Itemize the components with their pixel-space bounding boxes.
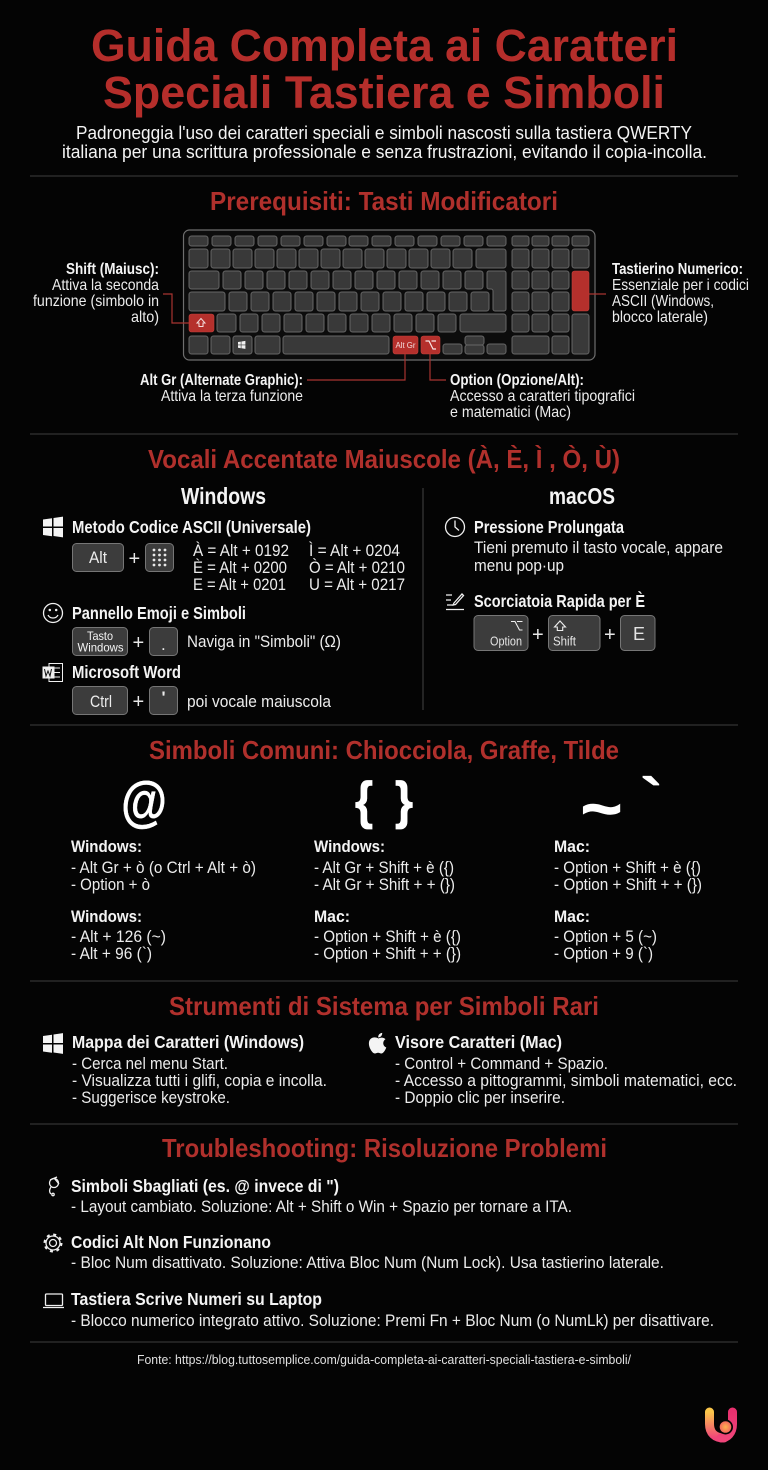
method: scorciatoia rapida: Scorciatoia Rapida per È — [474, 590, 645, 611]
column: chiocciola — [71, 769, 256, 963]
subtitle: Padroneggia l'uso dei caratteri speciali e simboli nascosti sulla tastiera QWERTY — [76, 122, 692, 143]
column: tilde e backtick: - Option + 5 (~) — [554, 927, 657, 946]
method: scorciatoia rapida — [474, 590, 655, 650]
issue: codici alt — [71, 1232, 664, 1272]
heading: strumenti di sistema: Strumenti di Sistema per Simboli Rari — [169, 991, 599, 1021]
callout: shift: Attiva la seconda — [52, 277, 159, 294]
subtitle: italiana per una scrittura professionale e senza frustrazioni, evitando il copia-incolla. — [62, 141, 707, 162]
tool: mappa dei caratteri: - Visualizza tutti i glifi, copia e incolla. — [72, 1071, 327, 1090]
method: pannello emoji: Tasto — [87, 629, 113, 643]
logo — [710, 1412, 733, 1438]
red key: option — [421, 336, 440, 354]
callout: alt gr: Alt Gr (Alternate Graphic): — [140, 372, 303, 389]
method: pressione prolungata: menu pop·up — [474, 556, 564, 575]
column: graffe: - Alt Gr + Shift + + (}) — [314, 875, 455, 894]
method: codice ascii: À = Alt + 0192 — [193, 541, 289, 560]
symbol: curly braces — [355, 772, 413, 830]
red key: alt gr: Alt Gr — [396, 340, 416, 350]
icon: gear — [44, 1234, 62, 1252]
method: microsoft word: Ctrl — [90, 692, 112, 711]
method: scorciatoia rapida: Option — [490, 634, 522, 648]
heading: troubleshooting: Troubleshooting: Risoluzione Problemi — [162, 1133, 607, 1163]
issue: simboli sbagliati: Simboli Sbagliati (es. @ invece di ") — [71, 1176, 339, 1196]
icon: windows logo — [43, 1033, 63, 1054]
issue: tastiera scrive numeri — [71, 1289, 714, 1330]
callout: shift — [33, 261, 189, 326]
column: graffe: Windows: — [314, 838, 385, 856]
method: pannello emoji: Pannello Emoji e Simboli — [72, 603, 246, 623]
symbol: curly braces: } — [395, 772, 413, 830]
symbol: at sign: @ — [121, 769, 167, 832]
tool: visore caratteri — [395, 1032, 737, 1107]
column: graffe — [314, 772, 461, 963]
panel: troubleshooting — [43, 1133, 714, 1330]
issue: tastiera scrive numeri: Tastiera Scrive Numeri su Laptop — [71, 1289, 322, 1309]
method: codice ascii: Ò = Alt + 0210 — [309, 558, 405, 577]
panel: strumenti di sistema — [43, 991, 737, 1107]
method: codice ascii: Alt — [89, 548, 107, 567]
callout: shift: alto) — [131, 309, 159, 326]
icon: smiley — [44, 604, 62, 622]
tool: visore caratteri: - Control + Command + Spazio. — [395, 1054, 608, 1073]
column: tilde e backtick — [554, 766, 702, 963]
method: pannello emoji: . — [161, 635, 166, 654]
tool: mappa dei caratteri: - Suggerisce keystroke. — [72, 1088, 230, 1107]
tool: mappa dei caratteri: - Cerca nel menu Start. — [72, 1054, 228, 1073]
column: chiocciola: - Alt Gr + ò (o Ctrl + Alt + ò) — [71, 858, 256, 877]
method: pannello emoji: + — [132, 632, 144, 654]
issue: codici alt: Codici Alt Non Funzionano — [71, 1232, 271, 1252]
icon: laptop — [43, 1294, 64, 1308]
callout: option — [430, 354, 635, 421]
column: tilde e backtick: - Option + Shift + è ({) — [554, 858, 701, 877]
column: chiocciola: - Option + ò — [71, 875, 150, 894]
callout: tastierino numerico: blocco laterale) — [612, 309, 708, 326]
column divider — [422, 488, 424, 710]
column: chiocciola: Windows: — [71, 838, 142, 856]
callout: option: e matematici (Mac) — [450, 404, 571, 421]
method: scorciatoia rapida: E — [633, 624, 645, 644]
red key: shift — [189, 314, 214, 332]
icon: writing — [446, 594, 464, 610]
callout: tastierino numerico: ASCII (Windows, — [612, 293, 714, 310]
tool: visore caratteri: - Doppio clic per inserire. — [395, 1088, 565, 1107]
method: pressione prolungata: Pressione Prolungata — [474, 517, 624, 537]
callout: shift: Shift (Maiusc): — [66, 261, 159, 278]
tool: visore caratteri: Visore Caratteri (Mac) — [395, 1032, 562, 1052]
column: graffe: - Option + Shift + è ({) — [314, 927, 461, 946]
column: chiocciola: - Alt + 126 (~) — [71, 927, 166, 946]
column: chiocciola: - Alt + 96 (`) — [71, 944, 152, 963]
keyboard diagram — [184, 230, 595, 360]
method: microsoft word — [72, 662, 331, 714]
tool: mappa dei caratteri — [72, 1032, 327, 1107]
heading: prerequisiti: Prerequisiti: Tasti Modificatori — [210, 186, 558, 216]
method: codice ascii: Ì = Alt + 0204 — [309, 541, 400, 560]
panel: simboli comuni — [71, 735, 702, 963]
method: scorciatoia rapida: + — [604, 624, 616, 646]
issue: simboli sbagliati — [71, 1176, 572, 1216]
method: microsoft word: ' — [162, 688, 166, 707]
icon: apple logo — [369, 1033, 386, 1054]
method: codice ascii: E = Alt + 0201 — [193, 575, 286, 594]
symbol: tilde and backtick: ` — [641, 766, 662, 829]
method: codice ascii: È = Alt + 0200 — [193, 558, 287, 577]
callout: alt gr — [140, 354, 405, 405]
method: microsoft word: Microsoft Word — [72, 662, 181, 682]
column: graffe: - Alt Gr + Shift + è ({) — [314, 858, 454, 877]
icon: clock — [446, 518, 464, 536]
method: pannello emoji: Naviga in "Simboli" (Ω) — [187, 632, 341, 651]
method: codice ascii: + — [128, 548, 140, 570]
method: pannello emoji: Windows — [78, 640, 124, 654]
method: scorciatoia rapida: Shift — [553, 634, 576, 648]
callout: tastierino numerico: Tastierino Numerico: — [612, 261, 743, 278]
subtitle — [62, 122, 707, 162]
heading: vocali accentate: Vocali Accentate Maiuscole (À, È, Ì , Ò, Ù) — [148, 444, 620, 474]
column: tilde e backtick: Mac: — [554, 838, 590, 856]
method: codice ascii: U = Alt + 0217 — [309, 575, 405, 594]
method: microsoft word: + — [132, 691, 144, 713]
heading: simboli comuni: Simboli Comuni: Chiocciola, Graffe, Tilde — [149, 735, 619, 765]
issue: codici alt: - Bloc Num disattivato. Soluzione: Attiva Bloc Num (Num Lock). Usa tastierino laterale. — [71, 1253, 664, 1272]
panel: vocali accentate — [42, 444, 723, 714]
panel: prerequisiti — [33, 186, 749, 421]
icon: windows key — [238, 341, 245, 349]
callout: tastierino numerico: Essenziale per i codici — [612, 277, 749, 294]
heading: windows: Windows — [181, 483, 266, 509]
column: tilde e backtick: - Option + 9 (`) — [554, 944, 653, 963]
red key: alt gr — [393, 336, 418, 354]
title — [91, 20, 678, 118]
callout: tastierino numerico — [589, 261, 749, 326]
column: graffe: Mac: — [314, 908, 350, 926]
icon: windows logo — [43, 517, 63, 537]
column: tilde e backtick: - Option + Shift + + (}) — [554, 875, 702, 894]
title: Guida Completa ai Caratteri — [91, 20, 678, 71]
tool: visore caratteri: - Accesso a pittogrammi, simboli matematici, ecc. — [395, 1071, 737, 1090]
symbol: tilde and backtick — [581, 766, 662, 842]
column: chiocciola: Windows: — [71, 908, 142, 926]
symbol: tilde and backtick: ~ — [581, 775, 622, 842]
heading: macos: macOS — [549, 483, 615, 509]
method: scorciatoia rapida: + — [532, 624, 544, 646]
column: macos — [446, 483, 723, 650]
method: microsoft word: poi vocale maiuscola — [187, 692, 331, 711]
symbol: curly braces: { — [355, 772, 373, 830]
column: tilde e backtick: Mac: — [554, 908, 590, 926]
icon: word — [42, 664, 62, 682]
column: windows — [42, 483, 405, 714]
callout: option: Option (Opzione/Alt): — [450, 372, 584, 389]
method: pressione prolungata — [474, 517, 723, 575]
tool: mappa dei caratteri: Mappa dei Caratteri (Windows) — [72, 1032, 304, 1052]
method: codice ascii: Metodo Codice ASCII (Universale) — [72, 517, 311, 537]
title: Speciali Tastiera e Simboli — [103, 67, 665, 118]
callout: option: Accesso a caratteri tipografici — [450, 388, 635, 405]
callout: alt gr: Attiva la terza funzione — [161, 388, 303, 405]
issue: tastiera scrive numeri: - Blocco numerico integrato attivo. Soluzione: Premi Fn + Bloc Num (o NumLk) per disattivare. — [71, 1311, 714, 1330]
column: graffe: - Option + Shift + + (}) — [314, 944, 461, 963]
source line: Fonte: https://blog.tuttosemplice.com/guida-completa-ai-caratteri-speciali-tastiera-e-simboli/ — [137, 1352, 631, 1367]
icon: wrong symbols — [50, 1177, 59, 1196]
callout: shift: funzione (simbolo in — [33, 293, 159, 310]
issue: simboli sbagliati: - Layout cambiato. Soluzione: Alt + Shift o Win + Spazio per tornare a ITA. — [71, 1197, 572, 1216]
method: pannello emoji — [72, 603, 341, 656]
red key: numeric keypad — [572, 271, 589, 311]
method: codice ascii — [72, 517, 405, 594]
method: pressione prolungata: Tieni premuto il tasto vocale, appare — [474, 538, 723, 557]
